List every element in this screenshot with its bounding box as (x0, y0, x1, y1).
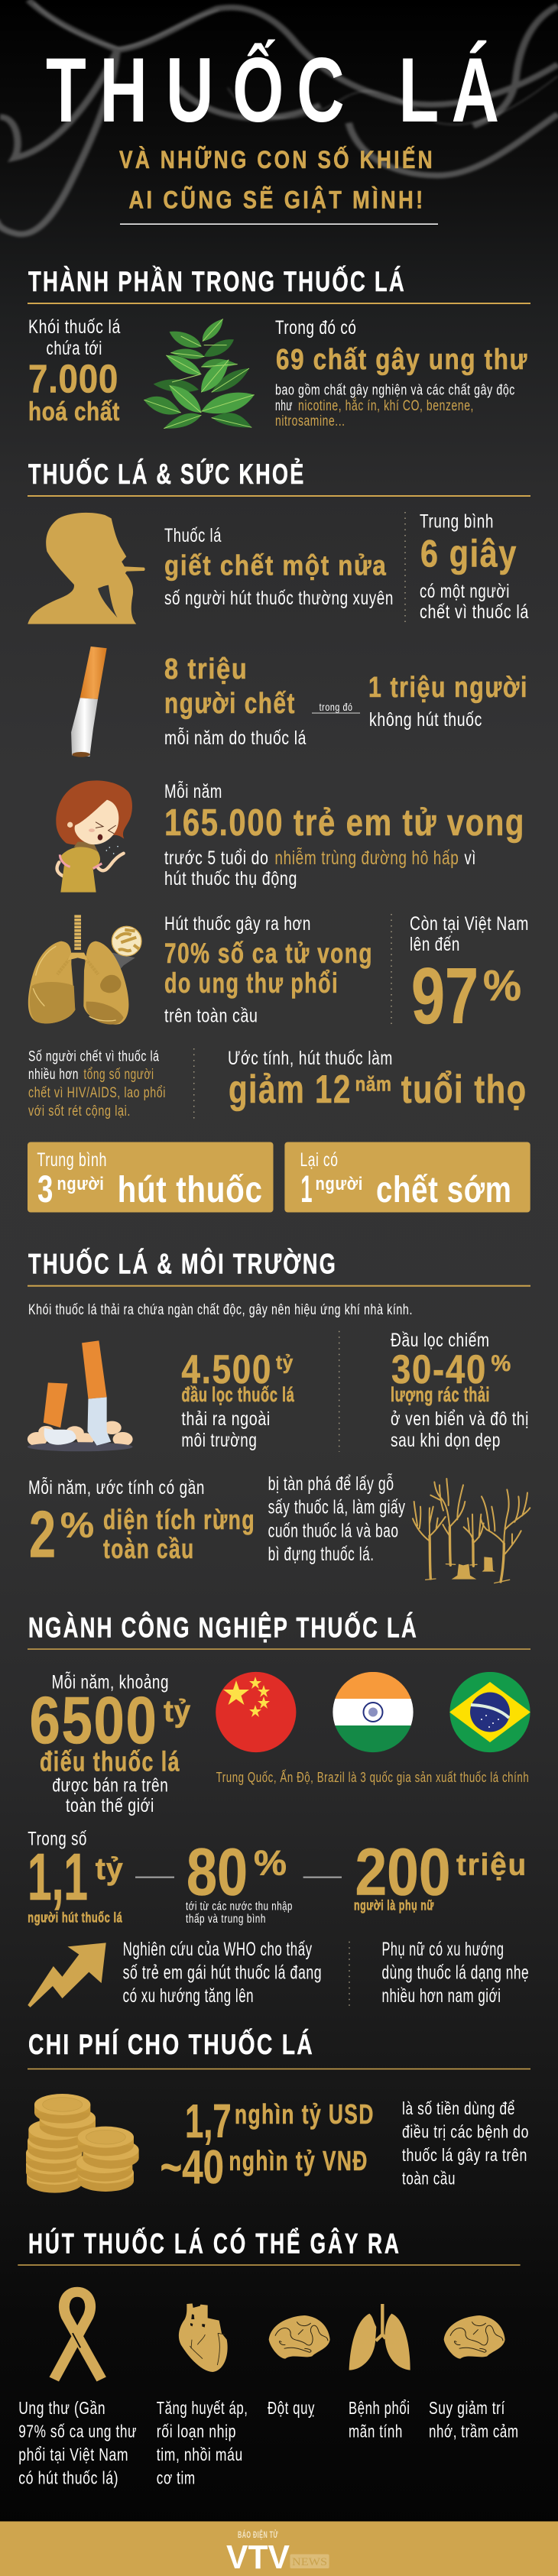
footer: BÁO ĐIỆN TỬ (238, 2529, 278, 2540)
text: 12 years (228, 1048, 527, 1112)
text: cancer: có hút thuốc lá) (18, 2467, 118, 2487)
text: 7000 chemicals: hoá chất (28, 397, 120, 426)
text: treatment cost: toàn cầu (402, 2169, 456, 2189)
callout: 3 smokers: Trung bình (37, 1149, 107, 1171)
text: 6 seconds: chết vì thuốc lá (420, 601, 529, 623)
text: intro: Khói thuốc lá thải ra chứa ngàn chất độc, gây nên hiệu ứng khí nhà kính. (28, 1302, 413, 1318)
text: cost figures: nghìn tỷ USD (235, 2098, 375, 2130)
text: 6500 billion: tỷ (164, 1695, 191, 1729)
text: forest destroyed: bì đựng thuốc lá. (268, 1544, 375, 1565)
text: 80 percent: % (254, 1843, 287, 1883)
text: 2 percent forest (28, 1476, 255, 1572)
icon: ribbon (54, 2292, 102, 2380)
text: 7000 chemicals: Khói thuốc lá (28, 316, 121, 338)
text: 1.1 billion: Trong số (28, 1828, 87, 1849)
text: 200 million: người là phụ nữ (354, 1898, 434, 1913)
icon: coins (26, 2094, 139, 2193)
text: 8 million: trong đó (320, 701, 353, 713)
text: cancer: Ung thư (Gần (18, 2398, 105, 2418)
panel: thành phần (28, 265, 530, 429)
panel: ngành công nghiệp (28, 1611, 530, 2009)
subtitle: VÀ NHỮNG CON SỐ KHIẾN (119, 146, 435, 173)
text: 7000 chemicals: 7.000 (28, 358, 118, 402)
icon: cigarette butts (28, 1340, 133, 1451)
text: 69 carcinogens: như (275, 398, 293, 414)
text: 70 percent: 70% số ca tử vong (164, 938, 373, 969)
text: memory: nhớ, trầm cảm (429, 2422, 519, 2442)
text: kills half: số người hút thuốc thường xuyên (164, 588, 394, 609)
text: 70 percent (164, 913, 373, 1027)
text: 8 million (164, 653, 528, 749)
text: heart disease: tim, nhồi máu (157, 2445, 243, 2464)
text: women: nhiều hơn nam giới (382, 1985, 501, 2007)
text: 6 seconds: có một người (420, 581, 510, 602)
callout: 3 smokers (28, 1142, 274, 1212)
text: 12 years: năm (355, 1073, 392, 1096)
text: 8 million: người chết (164, 688, 296, 720)
text: 69 carcinogens: nitrosamine... (275, 413, 346, 429)
text: women (382, 1939, 529, 2007)
text: 6500 billion: toàn thế giới (66, 1795, 154, 1816)
text: 30-40 percent: Đầu lọc chiếm (391, 1330, 490, 1351)
icon: lungs outline (349, 2304, 410, 2370)
text: cancer: phổi tại Việt Nam (18, 2445, 128, 2464)
text: cancer (18, 2398, 137, 2487)
text: 30-40 percent: sau khi dọn dẹp (391, 1430, 501, 1451)
smoke (0, 0, 558, 234)
subtitle (119, 146, 438, 225)
text: 6500 billion: được bán ra trên (52, 1774, 168, 1796)
icon: brain 2 (444, 2315, 505, 2359)
icon: india flag (333, 1672, 414, 1753)
text: treatment cost (402, 2098, 529, 2189)
text: memory: Suy giảm trí (429, 2398, 505, 2418)
text: 69 carcinogens: nicotine, hắc ín, khí CO, benzene, (298, 397, 474, 414)
logo: VTV: VTV (226, 2539, 290, 2576)
text: cost figures: nghìn tỷ VNĐ (229, 2145, 368, 2176)
footer (0, 2522, 558, 2576)
callout: 1 dies early: 1 (300, 1168, 313, 1210)
callout: 1 dies early: Lại có (300, 1149, 338, 1171)
heading: thuốc lá và sức khoẻ: THUỐC LÁ & SỨC KHOẺ (28, 458, 306, 490)
callout: 3 smokers: 3 (37, 1168, 54, 1210)
heading: thành phần trong thuốc lá: THÀNH PHẦN TRONG THUỐC LÁ (28, 265, 406, 297)
heading: chi phí cho thuốc lá: CHI PHÍ CHO THUỐC LÁ (28, 2028, 314, 2060)
text: 2 percent forest: % (60, 1505, 94, 1545)
icon: rising arrow (28, 1943, 106, 2007)
text: 2 percent forest: 2 (29, 1499, 56, 1572)
text: 165000 children: hút thuốc thụ động (164, 868, 297, 889)
text: 69 carcinogens: Trong đó có (275, 317, 356, 339)
text: 165000 children: nhiễm trùng đường hô hấp (274, 847, 459, 869)
text: 6 seconds: Trung bình (420, 511, 494, 533)
text: 2 percent forest: diện tích rừng (103, 1504, 255, 1535)
text: WHO study: số trẻ em gái hút thuốc lá đang (123, 1962, 322, 1983)
text: 4500 billion filters (181, 1347, 295, 1451)
text: 80 percent: thấp và trung bình (186, 1913, 266, 1926)
text: memory (429, 2398, 519, 2442)
text: 6500 billion: điếu thuốc lá (40, 1746, 180, 1777)
text: 165000 children: Mỗi năm (164, 780, 222, 802)
icon: tobacco plant (144, 319, 255, 429)
subtitle: AI CŨNG SẼ GIẬT MÌNH! (128, 186, 425, 214)
text: 6500 billion: 6500 (29, 1683, 157, 1758)
text: 12 years: giảm 12 (229, 1068, 352, 1112)
panel: môi trường (28, 1248, 530, 1583)
text: 200 million (354, 1836, 527, 1913)
text: 7000 chemicals (28, 316, 121, 426)
text: cost figures: ~40 (161, 2141, 224, 2194)
text: 30-40 percent: % (491, 1351, 511, 1376)
text: heart disease: Tăng huyết áp, (157, 2398, 248, 2418)
text: heart disease: cơ tim (157, 2467, 196, 2487)
text: deaths compared: nhiều hơn (28, 1067, 79, 1083)
icon: lungs (28, 915, 141, 1025)
text: 70 percent: trên toàn cầu (164, 1006, 258, 1027)
text: 30-40 percent (391, 1330, 529, 1451)
callout: 3 smokers: người (57, 1174, 104, 1194)
text: 4500 billion filters: thải ra ngoài (181, 1408, 271, 1430)
text: chronic lung disease: mãn tính (349, 2422, 403, 2442)
text: WHO study: có xu hướng tăng lên (123, 1985, 254, 2007)
text: WHO study (123, 1939, 322, 2007)
text: 12 years: tuổi thọ (401, 1068, 527, 1112)
text: 2 percent forest: Mỗi năm, ước tính có gần (28, 1476, 205, 1499)
text: kills half (164, 525, 394, 609)
panel: chi phí (26, 2028, 530, 2194)
callout: 1 dies early: người (315, 1174, 363, 1194)
icon: brain (269, 2315, 330, 2359)
text: heart disease: rối loạn nhịp (157, 2422, 236, 2442)
text: stroke: Đột quỵ (268, 2398, 315, 2418)
icon: heart (179, 2303, 228, 2372)
text: cost figures: 1,7 (185, 2095, 232, 2148)
text: cancer: 97% số ca ung thư (18, 2422, 137, 2442)
text: 12 years: Ước tính, hút thuốc làm (228, 1048, 393, 1069)
text: 6 seconds (420, 511, 529, 623)
text: 8 million: 8 triệu (164, 653, 248, 685)
text: deaths compared: tổng số người (83, 1067, 154, 1083)
text: 30-40 percent: 30-40 (391, 1347, 487, 1392)
text: 70 percent: Hút thuốc gây ra hơn (164, 913, 311, 935)
text: 165000 children (164, 780, 525, 889)
text: forest destroyed (268, 1473, 406, 1565)
heading: thuốc lá và môi trường: THUỐC LÁ & MÔI TRƯỜNG (28, 1248, 337, 1280)
text: kills half: Thuốc lá (164, 525, 222, 546)
text: 7000 chemicals: chứa tới (46, 338, 102, 359)
text: 165000 children: trước 5 tuổi do (164, 847, 269, 869)
text: forest destroyed: sấy thuốc lá, làm giấy (268, 1497, 406, 1518)
heading: ngành công nghiệp thuốc lá: NGÀNH CÔNG NGHIỆP THUỐC LÁ (28, 1611, 418, 1643)
text: kills half: giết chết một nửa (164, 550, 387, 582)
text: 4500 billion filters: tỷ (276, 1351, 294, 1374)
text: 70 percent: do ung thư phổi (164, 967, 339, 999)
text: 97 percent (410, 913, 529, 1041)
heading: hút thuốc lá có thể gây ra: HÚT THUỐC LÁ CÓ THỂ GÂY RA (28, 2227, 401, 2259)
text: 8 million: mỗi năm do thuốc lá (164, 727, 307, 749)
icon: china flag (216, 1672, 296, 1752)
text: 4500 billion filters: môi trường (181, 1430, 257, 1451)
text: 1.1 billion: tỷ (96, 1852, 124, 1886)
text: 6500 billion: Mỗi năm, khoảng (52, 1670, 169, 1693)
icon: cigarette (71, 646, 107, 757)
text: forest destroyed: cuốn thuốc lá và bao (268, 1521, 399, 1542)
text: cost figures (161, 2095, 375, 2194)
icon: smoker silhouette (28, 513, 145, 624)
text: 6500 billion (29, 1670, 191, 1816)
panel: bệnh (18, 2227, 521, 2487)
icon: brazil flag (449, 1672, 530, 1753)
text: 6 seconds: 6 giây (420, 533, 517, 575)
text: 4500 billion filters: đầu lọc thuốc lá (181, 1383, 295, 1406)
text: deaths compared (28, 1048, 166, 1120)
text: 8 million: không hút thuốc (369, 709, 482, 731)
text: 80 percent: 80 (187, 1836, 248, 1910)
text: 30-40 percent: lượng rác thải (391, 1383, 490, 1406)
icon: coughing girl (56, 780, 132, 893)
callout: 1 dies early: chết sớm (376, 1170, 512, 1210)
text: 1.1 billion: 1,1 (28, 1840, 88, 1914)
text: WHO study: Nghiên cứu của WHO cho thấy (123, 1939, 313, 1960)
panel: sức khoẻ (28, 458, 530, 1212)
text: 4500 billion filters: 4.500 (181, 1347, 272, 1392)
title: THUỐC LÁ (46, 39, 499, 141)
text: 97 percent: 97 (411, 952, 479, 1041)
text: deaths compared: Số người chết vì thuốc lá (28, 1048, 160, 1065)
logo: NEWS: NEWS (292, 2556, 327, 2568)
icon: bare trees (413, 1479, 530, 1583)
text: forest destroyed: bị tàn phá để lấy gỗ (268, 1473, 394, 1495)
callout: 3 smokers: hút thuốc (118, 1170, 263, 1210)
text: heart disease (157, 2398, 248, 2487)
text: chronic lung disease: Bệnh phổi (349, 2398, 410, 2418)
callout: 1 dies early (284, 1142, 530, 1212)
text: treatment cost: là số tiền dùng để (402, 2098, 515, 2118)
text: 80 percent (186, 1836, 293, 1926)
text: chronic lung disease (349, 2398, 410, 2442)
text: 200 million: 200 (355, 1836, 451, 1910)
text: 165000 children: vì (465, 847, 476, 869)
text: 97 percent: % (483, 961, 521, 1010)
text: 2 percent forest: toàn cầu (103, 1533, 195, 1564)
text: 80 percent: tới từ các nước thu nhập (186, 1900, 293, 1913)
text: 69 carcinogens (275, 317, 528, 429)
text: 97 percent: lên đến (410, 934, 460, 955)
text: deaths compared: với sốt rét cộng lại. (28, 1103, 131, 1120)
text: 200 million: triệu (456, 1849, 527, 1882)
text: deaths compared: chết vì HIV/AIDS, lao phổi (28, 1085, 166, 1101)
text: 1.1 billion: người hút thuốc lá (28, 1910, 122, 1926)
